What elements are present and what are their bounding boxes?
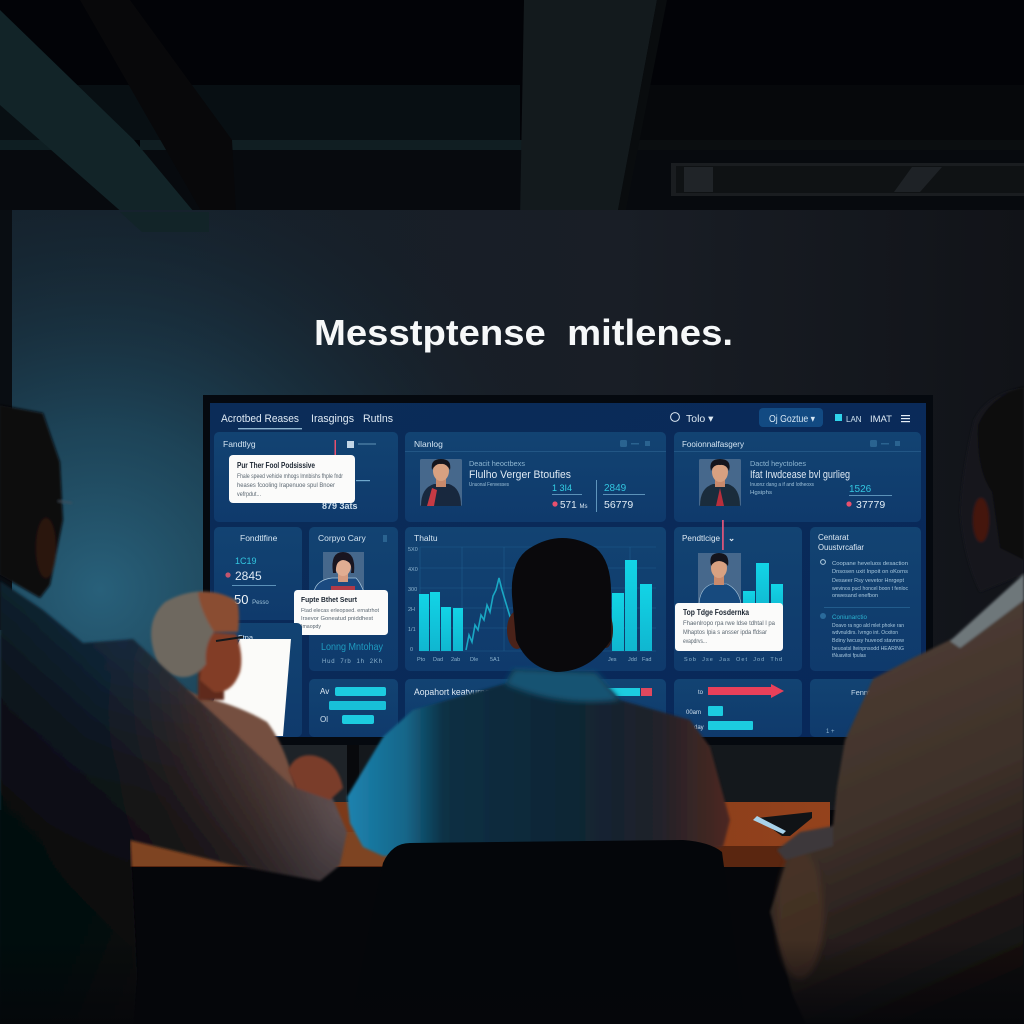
panel: profile center: Nlanlog — [414, 439, 443, 449]
panel: content summary: Desaeer Rsy vevetor Hnrgept — [832, 578, 904, 584]
tooltip card — [675, 603, 783, 651]
tooltip card: vefrpdut... — [237, 492, 261, 498]
left man's head — [0, 405, 63, 598]
panel: top left with tooltip — [214, 432, 398, 522]
panel: lower left — [214, 623, 302, 737]
avatar: man with glasses — [699, 459, 741, 506]
panel: content summary: Coniunarctio — [832, 615, 868, 621]
avatar: woman — [314, 552, 364, 592]
panel: content summary — [810, 527, 921, 671]
panel: tag chips: Av — [320, 687, 329, 696]
tooltip card — [294, 590, 388, 635]
panel: main chart: Jes — [608, 657, 617, 663]
bar chart — [419, 560, 652, 651]
panel: main chart: 4X0 — [408, 567, 418, 573]
top navigation bar: Oj Goztue ▾ — [769, 414, 815, 425]
panel: content summary: Doavo ra ngo ald mlet phoke ran — [832, 623, 904, 629]
white paper — [213, 639, 291, 736]
panel: stats: 2845 — [235, 569, 262, 583]
floor shadow below table — [0, 868, 1024, 1024]
panel: person card: Hud 7rb 1h 2Kh — [322, 659, 382, 665]
panel: profile right: Dactd heyctoloes — [750, 459, 806, 468]
panel: main chart: Dad — [433, 657, 443, 663]
sleeve light — [776, 851, 824, 979]
panel: person with bars: Pendtlcige — [682, 533, 720, 543]
panel: profile right: Ifat Irwdcease bvl gurlieg — [750, 469, 850, 481]
panel: main chart: 5X0 — [408, 547, 418, 553]
person: older man with paper — [150, 591, 296, 830]
panel: content summary: Bdiny lwcusy huveod stavnow — [832, 638, 904, 644]
panel: profile center: 2849 — [604, 483, 627, 494]
panel: arrow row: day — [694, 725, 704, 731]
panel: main chart: Pto — [417, 657, 425, 663]
ceiling vent — [671, 163, 1024, 196]
foreground vignette — [0, 940, 1024, 1024]
back wall — [0, 210, 1024, 810]
tooltip card: Fhaenlropo rpa rwe ldse tdhtal l pa — [683, 621, 776, 627]
top navigation bar: Irasgings — [311, 413, 354, 425]
panel: main chart: 1/1 — [408, 627, 416, 633]
panel: profile center: Unuonal Fenvesses — [469, 482, 509, 488]
panel: content summary: Dnsosen uxit Inpoit on oKorns — [832, 569, 908, 575]
panel: progress row: Aopahort keatvurnos — [414, 687, 494, 697]
tooltip card: Mhaptos Ipia s ansser ipda ffdsar — [683, 630, 767, 636]
mini bar chart — [743, 563, 783, 613]
panel: main chart: Dle — [470, 657, 478, 663]
avatar: man in red and navy — [420, 459, 462, 506]
tooltip card: Irsevor Goneatud pniddhest — [301, 616, 373, 622]
panel: profile right: Hgsiphs — [750, 490, 772, 496]
panel: profile center: 56779 — [604, 499, 633, 511]
panel: tag chips — [309, 679, 398, 737]
panel: tag chips: Ol — [320, 715, 328, 724]
panel: person with bars: ⌄ — [728, 533, 735, 543]
tooltip card: Imaopdy — [301, 624, 321, 630]
title: Messtptense mitlenes. — [314, 312, 733, 353]
panel: stats: Fondtlfine — [240, 533, 278, 543]
older man's shirt — [150, 690, 296, 830]
panel: profile center — [405, 432, 666, 522]
collar — [950, 574, 1024, 648]
panel: main chart: 300 — [408, 587, 417, 593]
panel: content summary: wdvnuldirs. Ivrngo int. Ocxiton — [831, 630, 898, 636]
panel: person card — [294, 527, 398, 671]
panel: top left with tooltip: Fandtlyg — [223, 439, 256, 449]
panel: main chart: 0 — [410, 647, 413, 653]
top navigation bar: Tolo ▾ — [686, 413, 714, 425]
wall below monitor — [203, 745, 933, 805]
left man's hand — [288, 755, 343, 800]
panel: content summary: beuoatsl lteinpnsodd HEARING — [832, 646, 904, 652]
tooltip card — [229, 455, 355, 503]
panel: profile center: 1 3I4 — [552, 483, 572, 493]
beam lower end over wall — [120, 212, 209, 232]
panel: profile center: 571 Ms — [560, 500, 587, 511]
tooltip card: Ftad elecas erleopsed. ernatrhot — [301, 608, 379, 614]
avatar: man with shirt — [698, 553, 741, 604]
top navigation bar: Acrotbed Reases — [221, 413, 299, 425]
tooltip card: Pur Ther Fool Podsissive — [237, 461, 316, 470]
panel: profile right — [674, 432, 921, 522]
older man's head — [151, 591, 241, 700]
panel: content summary: Coopane heveluos desaction — [832, 561, 908, 567]
wall monitor dashboard — [203, 395, 933, 745]
line chart — [466, 578, 514, 650]
panel: main chart: Fad — [642, 657, 651, 663]
panel: main chart: Thaltu — [414, 533, 438, 543]
panel: bottom right — [810, 679, 921, 737]
tooltip card: Fhale speed vehicle mhogs lmnbishs fhple fndr — [237, 474, 343, 480]
panel: content summary: Ouustvrcafiar — [818, 543, 864, 552]
person: left man — [0, 405, 347, 1024]
collar highlight — [505, 669, 620, 702]
panel: content summary: onwesand enefbon — [832, 593, 878, 599]
panel: arrow row: to — [698, 690, 704, 696]
panel: stats: 1C19 — [235, 556, 257, 566]
right man's head — [960, 387, 1024, 592]
panel: arrow row — [674, 679, 802, 737]
panel: person card: Corpyo Cary — [318, 533, 366, 543]
panel: content summary: tNuavitoi fpulas — [832, 653, 866, 659]
tooltip card: Fupte Bthet Seurt — [301, 595, 357, 604]
top navigation bar: Rutlns — [363, 413, 393, 425]
panel: profile right: 1526 — [849, 484, 872, 495]
panel: profile center: Deacit heoctbexs — [469, 459, 525, 468]
panel: lower left: Ftpa — [238, 633, 254, 642]
office chair — [350, 840, 745, 1024]
monitor stand — [277, 745, 359, 805]
panel: stats — [214, 527, 302, 620]
panel: content summary: wevinos pucl honcel boon t fenloc — [831, 586, 908, 592]
tooltip card: heases fcooling Irapenuoe spul Bnoer — [237, 483, 335, 489]
red arrow — [708, 684, 784, 698]
panel: bottom right: 1 + — [826, 729, 835, 735]
panel: bottom right: Fenntea — [851, 688, 879, 697]
tooltip card: Top Tdge Fosdernka — [683, 608, 750, 617]
panel: content summary: Centarat — [818, 533, 849, 542]
panel: profile right: 37779 — [856, 499, 885, 511]
person: center man from behind — [347, 538, 730, 856]
panel: main chart: 5A1 — [490, 657, 500, 663]
panel: person card: Lonng Mntohay — [321, 641, 384, 653]
panel: arrow row: 00am — [686, 710, 701, 716]
panel: main chart: 2H — [408, 607, 415, 613]
panel: main chart — [405, 527, 666, 671]
panel: profile right: Inuonz dang a if and lotheoxs — [750, 482, 814, 488]
panel: main chart: 2ab — [451, 657, 460, 663]
panel: progress row — [405, 679, 666, 737]
top navigation bar: LAN — [846, 415, 862, 424]
ceiling with beams — [0, 0, 1024, 230]
panel: stats: 50 Pesso — [234, 592, 269, 607]
conference table — [130, 802, 830, 867]
person: right man — [770, 387, 1024, 1024]
panel: person with bars: Sob Jse Jas Oet Jod Thd — [684, 657, 782, 663]
tooltip card: evapdrvs... — [683, 639, 707, 645]
cuff — [777, 826, 833, 860]
top navigation bar: IMAT — [870, 414, 892, 425]
panel: profile center: Flulho Verger Btoufies — [469, 469, 571, 481]
top navigation bar — [221, 408, 910, 429]
panel: main chart: Jdd — [628, 657, 637, 663]
panel: profile right: Fooionnalfasgery — [682, 439, 745, 449]
panel: person with bars — [674, 520, 802, 671]
panel: top left with tooltip: 879 3ats — [322, 501, 358, 511]
